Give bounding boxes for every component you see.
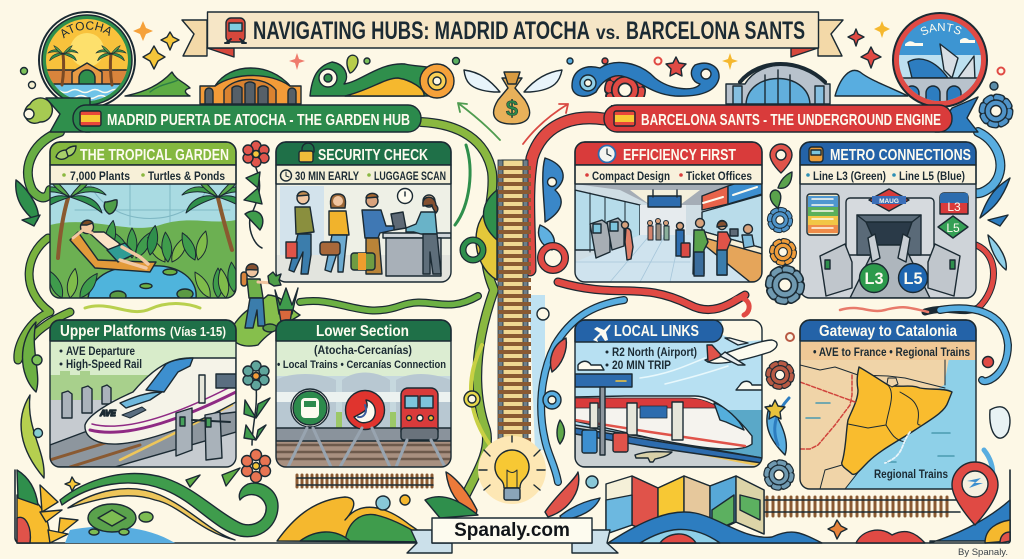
panel: metro connections: METRO CONNECTIONS — [830, 147, 971, 164]
footer ribbon: Spanaly.com: Spanaly.com — [454, 520, 570, 541]
icon: Sants station facade — [726, 64, 830, 104]
decorative small track — [297, 475, 433, 487]
badge: Sants — [892, 12, 988, 133]
panel: upper platforms: Upper Platforms — [60, 323, 166, 340]
panel: upper platforms: (Vías 1-15) — [170, 324, 226, 339]
icon: airplane — [705, 338, 777, 365]
icon: location pin — [952, 462, 998, 525]
panel: upper platforms: AVE Departure — [66, 346, 135, 358]
icon: white plane — [593, 325, 611, 342]
panel: gateway to Catalonia — [800, 320, 976, 489]
icon: clock — [280, 170, 292, 181]
heading: Madrid Atocha — [46, 98, 421, 132]
title text: NAVIGATING HUBS: MADRID ATOCHA — [253, 17, 590, 45]
title text: BARCELONA SANTS — [626, 17, 805, 45]
icon: flying money bag — [464, 70, 562, 124]
icon: clock — [598, 146, 616, 162]
arrows to the money bag — [458, 103, 568, 144]
badge: Atocha — [38, 11, 136, 104]
icon: folded map — [606, 476, 764, 536]
gears and pin between right panels — [765, 144, 801, 487]
left green swirl frame — [16, 68, 497, 512]
panel: security check: LUGGAGE SCAN — [374, 171, 446, 183]
panel: upper platforms — [50, 320, 236, 467]
title banner — [182, 12, 843, 57]
panel: efficiency first: Compact Design — [592, 171, 670, 183]
panel: upper platforms: High-Speed Rail — [66, 359, 142, 371]
panel: efficiency first — [575, 142, 762, 282]
panel: metro connections: Line L5 (Blue) — [899, 171, 965, 183]
icon: red train — [225, 18, 246, 43]
sparkles right — [848, 21, 1010, 124]
panel: local links: 20 MIN TRIP — [612, 360, 671, 372]
panel: local links — [575, 320, 777, 467]
panel: metro connections: L3 — [947, 200, 961, 214]
panel: the tropical garden: 7,000 Plants — [70, 171, 130, 183]
panel: gateway to Catalonia: Gateway to Catalonia — [819, 323, 957, 340]
panel: the tropical garden: THE TROPICAL GARDEN — [80, 147, 229, 164]
panel: efficiency first: EFFICIENCY FIRST — [623, 147, 736, 164]
panel: local links: LOCAL LINKS — [614, 323, 699, 340]
panel: metro connections: L3 — [864, 269, 884, 288]
top ornaments right — [567, 53, 908, 106]
panel: metro connections — [800, 142, 976, 298]
footer ribbon: Spanaly.com — [407, 518, 618, 553]
railway track center — [498, 160, 531, 446]
panel: security check — [276, 142, 451, 282]
heading: Madrid Atocha: MADRID PUERTA DE ATOCHA - THE GARDEN HUB — [107, 112, 410, 129]
bottom blue swirl band — [590, 470, 1010, 543]
icon: lightbulb — [478, 436, 546, 504]
heading: Barcelona Sants — [604, 105, 952, 132]
panel: security check: 30 MIN EARLY — [295, 171, 359, 183]
icon: padlock — [299, 143, 314, 162]
leaves around the lightbulb — [425, 472, 600, 520]
panel: lower section — [276, 320, 451, 467]
panel: lower section: Lower Section — [316, 323, 409, 340]
panel: upper platforms: AVE — [99, 409, 117, 418]
panel: metro connections: MAUG — [879, 198, 899, 205]
bottom track right — [765, 497, 960, 516]
panel: the tropical garden: Turtles & Ponds — [148, 171, 225, 183]
flower vine left top — [243, 141, 269, 248]
icon: Spanish flag — [80, 111, 101, 126]
icon: flying money bag: $ — [506, 96, 518, 121]
panel: metro connections: Line L3 (Green) — [813, 171, 886, 183]
panel: metro connections: L5 — [904, 269, 922, 288]
top ornaments left — [125, 55, 460, 98]
panel: lower section: (Atocha-Cercanías) — [314, 345, 412, 357]
panel: efficiency first: Ticket Offices — [686, 171, 752, 183]
icon: Spanish flag — [614, 111, 635, 126]
panel: local links: R2 North (Airport) — [612, 347, 697, 359]
title text: vs. — [596, 23, 620, 44]
panel: the tropical garden — [49, 141, 237, 299]
panel: security check: SECURITY CHECK — [318, 147, 429, 164]
right red and blue swirl frame — [529, 118, 1010, 500]
icon: turtle — [88, 504, 153, 535]
panel: gateway to Catalonia: • AVE to France • Regional Trains — [813, 347, 970, 359]
gardener and plant island — [230, 264, 300, 346]
icon: metro train — [809, 147, 823, 162]
signature: By Spanaly. — [958, 547, 1008, 558]
panel: metro connections: L5 — [946, 221, 960, 235]
sparkles left — [133, 21, 305, 70]
badge: Atocha: ATOCHA — [61, 21, 110, 38]
flower vine left middle — [242, 361, 270, 482]
icon: leaves — [56, 146, 76, 159]
badge: Sants: SANTS — [920, 23, 962, 35]
icon: Atocha station facade — [200, 68, 301, 104]
panel: gateway to Catalonia: Regional Trains — [874, 469, 948, 481]
panel: lower section: • Local Trains • Cercanías Connection — [277, 359, 446, 371]
bottom green swirl band — [15, 468, 435, 543]
